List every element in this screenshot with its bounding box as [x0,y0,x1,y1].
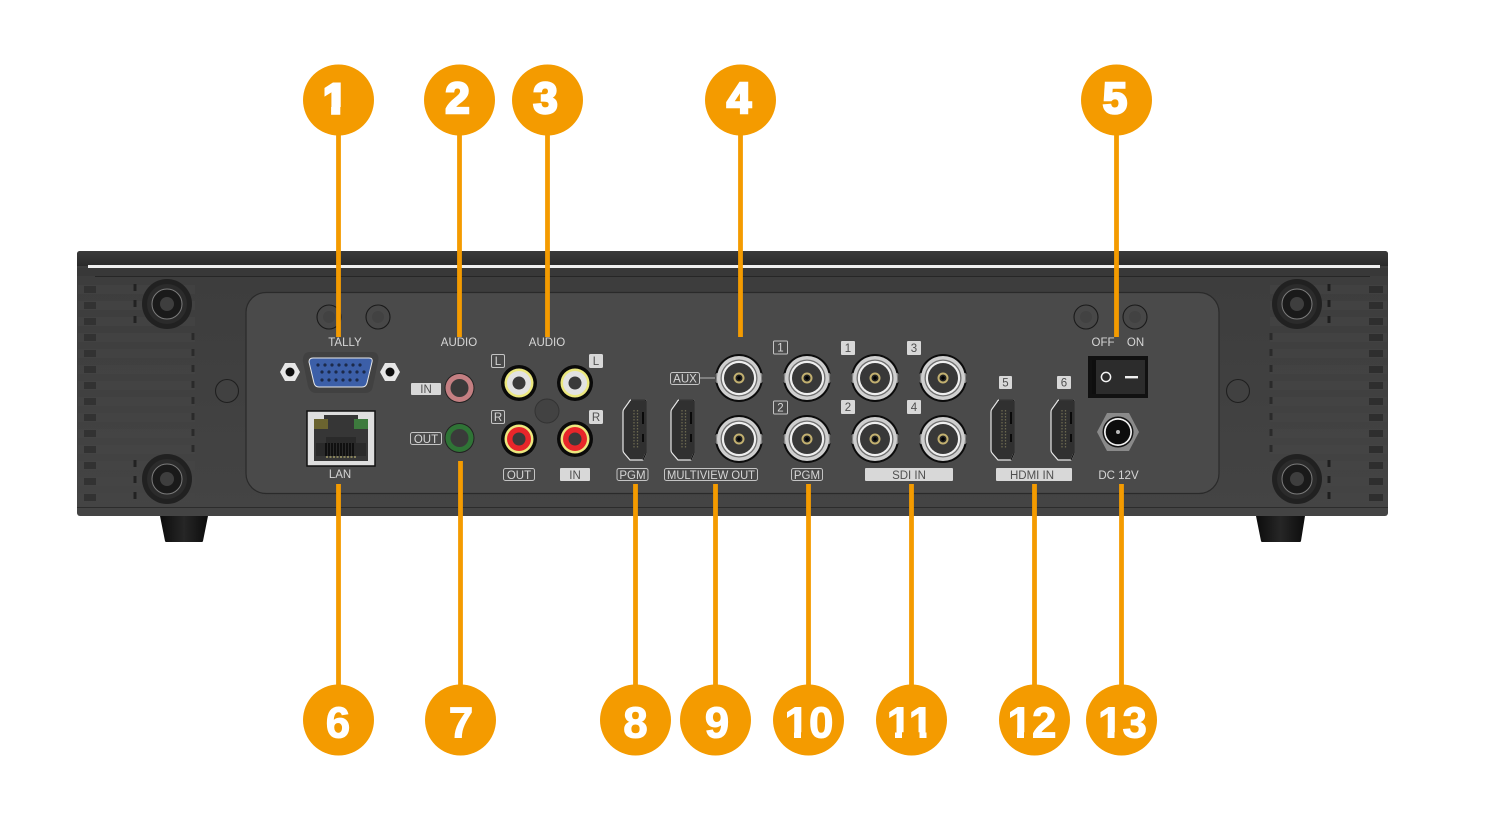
port: HDMI outputs: MULTIVIEW OUT [667,470,755,482]
badge 13: 13 [1098,698,1147,748]
badge 2 [424,64,495,136]
badge 7: 7 [449,698,473,748]
badge 11: 11 [887,698,933,748]
port: SDI in: 1 [845,343,851,355]
port: AUX and outputs BNC: 2 [777,402,784,414]
device chassis [77,251,1388,542]
badge 7 [425,684,496,756]
port: HDMI in: HDMI IN [1010,470,1054,482]
vents left [78,284,195,502]
badge 1 [303,64,374,136]
badge 10: 10 [785,698,833,748]
badge 12: 12 [1008,698,1056,748]
port: RCA audio: L [495,356,502,368]
foot right [1256,516,1305,542]
power switch: ON [1127,337,1144,349]
port: SDI in: SDI IN [892,470,926,482]
port: SDI in: 3 [911,343,917,355]
port: RCA audio [492,337,603,482]
port: RCA audio: OUT [507,470,531,482]
port: RCA audio: R [592,412,600,424]
port: audio in/out jacks: AUDIO [441,337,477,349]
port: SDI in [841,341,967,482]
badge 4 [705,64,776,136]
badge 5: 5 [1103,74,1127,123]
side screws [216,380,1250,402]
port: HDMI in [991,376,1074,482]
power switch: OFF [1092,337,1114,349]
port: AUX and outputs BNC [670,341,831,463]
callout lines top [338,130,1116,337]
badge 8: 8 [623,698,648,748]
DC jack [1097,413,1139,482]
badge 6 [303,684,374,756]
port: SDI in: 4 [911,402,918,414]
badge 9: 9 [705,698,729,748]
vents right [1270,284,1387,502]
port: RCA audio: AUDIO [529,337,565,349]
rear panel body [77,251,1388,516]
port: HDMI outputs: PGM [794,470,820,482]
badge 3 [512,64,583,136]
callout lines bottom [338,461,1122,690]
badge 4: 4 [727,74,752,123]
port: HDMI in: 6 [1061,378,1067,390]
port: SDI in: 2 [845,402,851,414]
badge 11 [876,684,947,756]
port: audio in/out jacks: IN [420,384,432,396]
badge 5 [1081,64,1152,136]
badge 1: 1 [323,75,347,122]
badge 6: 6 [326,698,350,748]
port: LAN: LAN [329,469,351,481]
badge 13 [1086,684,1157,756]
port: audio in/out jacks: OUT [414,434,438,446]
port: AUX and outputs BNC: 1 [777,342,784,354]
port: HDMI in: 5 [1002,378,1009,390]
port: tally VGA [280,337,400,393]
badge 8 [600,684,671,756]
badge 9 [680,684,751,756]
port: RCA audio: L [593,356,600,368]
port: tally VGA: TALLY [328,337,362,349]
port: audio in/out jacks [410,337,477,453]
port: HDMI outputs [617,400,822,482]
port: LAN [307,411,375,481]
badge 3: 3 [533,74,558,123]
port: HDMI outputs: PGM [619,470,646,482]
DC jack: DC 12V [1098,470,1139,482]
badge 12 [999,684,1070,756]
badge 10 [773,684,844,756]
badge 2: 2 [445,74,470,123]
foot left [160,516,208,542]
connector plate [246,292,1219,494]
power switch [1088,337,1148,398]
rack knobs [142,279,1322,504]
port: RCA audio: R [494,412,502,424]
top lid [77,251,1388,266]
port: RCA audio: IN [569,470,581,482]
port: AUX and outputs BNC: AUX [673,374,697,386]
